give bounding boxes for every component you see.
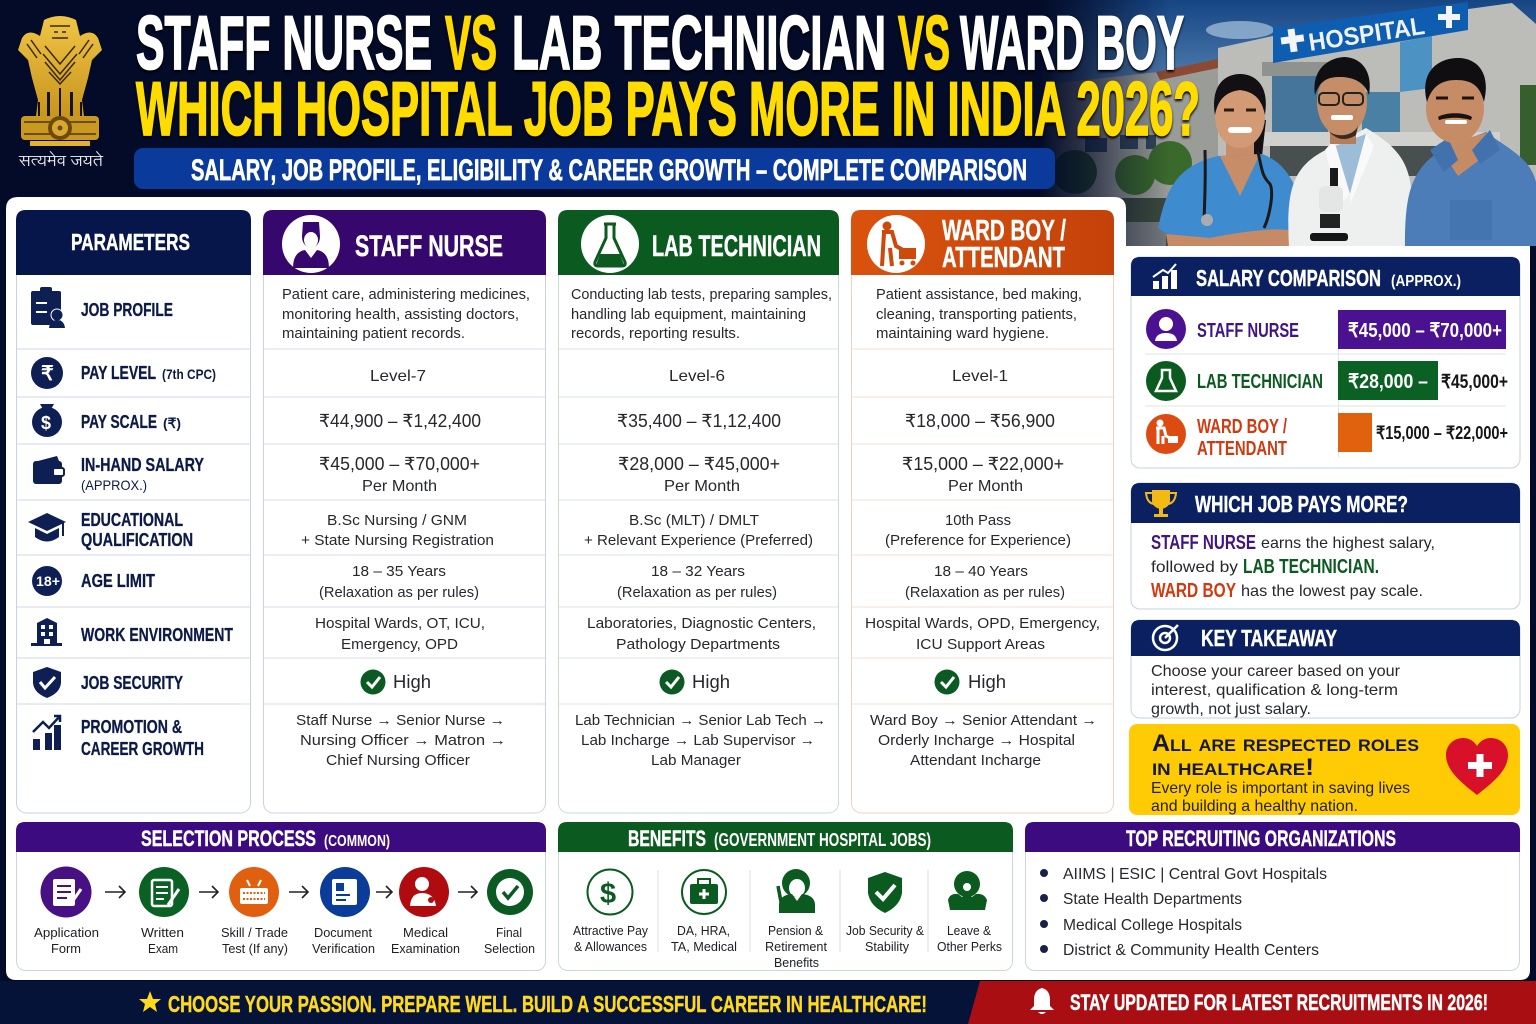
benefit: attractive pay: & Allowances: [574, 939, 647, 954]
title: LAB TECHNICIAN: [512, 1, 886, 86]
icon: rising bars: [1153, 264, 1177, 289]
panel: benefits: (GOVERNMENT HOSPITAL JOBS): [714, 830, 931, 850]
panel: ward boy column: Level-1: [952, 368, 1008, 385]
panel: ward boy column: ₹18,000 – ₹56,900: [905, 411, 1055, 431]
row: pay level: PAY LEVEL: [81, 363, 156, 383]
row: promotion and career growth: [33, 716, 204, 759]
row: promotion and career growth: CAREER GROWTH: [81, 739, 204, 759]
panel: which job pays more: WARD BOY: [1151, 580, 1237, 602]
benefit: pension: Retirement: [765, 939, 827, 954]
row: job profile: JOB PROFILE: [81, 300, 173, 320]
step: document verification: [312, 867, 375, 956]
panel: staff nurse column: Nursing Officer → Matron →: [300, 732, 506, 749]
emblem of India: [18, 16, 102, 146]
icon: attendant with cart: [867, 215, 925, 273]
panel: staff nurse column: ₹45,000 – ₹70,000+: [319, 454, 480, 474]
panel: benefits: [558, 822, 1013, 970]
person: ward attendant: [1405, 58, 1536, 246]
benefit: attractive pay: Attractive Pay: [573, 923, 648, 938]
row: promotion and career growth: PROMOTION &: [81, 717, 182, 737]
panel: top recruiting organizations: AIIMS | ESIC | Central Govt Hospitals: [1063, 866, 1327, 883]
title: VS: [898, 1, 950, 86]
icon: trophy: [1146, 490, 1176, 517]
step: final selection: [484, 869, 535, 956]
panel: ward boy column: [851, 210, 1114, 813]
icon: star: [139, 991, 161, 1012]
panel: lab technician column: records, reporting results.: [571, 325, 740, 342]
panel: staff nurse column: B.Sc Nursing / GNM: [327, 512, 467, 529]
panel: staff nurse column: Hospital Wards, OT, ICU,: [315, 615, 485, 632]
callout: respected roles: in healthcare!: [1152, 754, 1314, 781]
panel: selection process: [16, 822, 546, 970]
panel: ward boy column: Ward Boy → Senior Attendant →: [870, 712, 1097, 729]
panel: ward boy column: Attendant Incharge: [910, 752, 1041, 769]
panel: ward boy column: cleaning, transporting patients,: [876, 306, 1077, 323]
step: written exam: [139, 867, 189, 956]
benefit: allowances: DA, HRA,: [677, 923, 730, 938]
panel: lab technician column: Lab Manager: [651, 752, 741, 769]
panel: top recruiting organizations: State Health Departments: [1063, 891, 1242, 908]
subtitle bar: SALARY, JOB PROFILE, ELIGIBILITY & CAREER GROWTH – COMPLETE COMPARISON: [191, 154, 1027, 187]
row: age limit: [32, 566, 155, 596]
panel: staff nurse column: (Relaxation as per rules): [319, 584, 479, 601]
benefit: allowances: [671, 870, 737, 954]
step: skill test: [221, 867, 288, 956]
panel: benefits: BENEFITS: [628, 826, 706, 851]
panel: which job pays more: [1131, 483, 1520, 609]
panel: ward boy column: Hospital Wards, OPD, Emergency,: [865, 615, 1100, 632]
icon: check high: [934, 670, 960, 694]
row: pay scale: [32, 404, 181, 437]
step: final selection: Selection: [484, 941, 535, 956]
step: medical examination: Examination: [391, 941, 460, 956]
panel: staff nurse column: Emergency, OPD: [341, 636, 458, 653]
panel: ward boy column: Per Month: [948, 478, 1023, 495]
row: in-hand salary: [33, 455, 204, 493]
benefit: attractive pay: [573, 870, 648, 954]
step: written exam: Written: [141, 925, 184, 940]
row: ward boy salary: WARD BOY /: [1197, 416, 1287, 438]
row: work environment: WORK ENVIRONMENT: [81, 625, 233, 645]
panel: staff nurse column: Patient care, administering medicines,: [282, 286, 530, 303]
heading: ward boy attendant: [942, 215, 1066, 274]
hero photo: hospital and three staff: [1040, 0, 1536, 246]
icon: nurse: [282, 215, 340, 273]
benefit: leave and perks: Leave &: [947, 923, 991, 938]
row: lab technician salary: ₹28,000 –: [1348, 371, 1428, 393]
step: written exam: Exam: [148, 941, 178, 956]
row: pay level: (7th CPC): [162, 366, 216, 382]
arrow: [458, 886, 477, 898]
panel: lab technician column: High: [692, 672, 730, 692]
panel: lab technician column: ₹28,000 – ₹45,000+: [618, 454, 780, 474]
arrow: [289, 886, 308, 898]
panel: staff nurse column: ₹44,900 – ₹1,42,400: [319, 411, 481, 431]
step: medical examination: [391, 867, 460, 956]
arrow: [376, 886, 392, 898]
step: skill test: Skill / Trade: [221, 925, 288, 940]
icon: check high: [660, 670, 684, 694]
step: document verification: Document: [314, 925, 372, 940]
panel: salary comparison: [1131, 257, 1520, 468]
panel: lab technician column: handling lab equipment, maintaining: [571, 306, 806, 323]
person: staff nurse: [1158, 74, 1307, 246]
panel: key takeaway: growth, not just salary.: [1151, 701, 1311, 718]
panel: top recruiting organizations: [1025, 822, 1520, 970]
row: age limit: AGE LIMIT: [81, 571, 155, 591]
arrow: [199, 886, 218, 898]
row: ward boy salary: ATTENDANT: [1197, 438, 1287, 460]
panel: ward boy column: ₹15,000 – ₹22,000+: [902, 454, 1064, 474]
panel: ward boy column: ICU Support Areas: [916, 636, 1045, 653]
benefit: pension: Pension &: [768, 923, 823, 938]
title: VS: [445, 1, 497, 86]
row: educational qualification: QUALIFICATION: [81, 530, 193, 550]
subtitle bar: [134, 148, 1055, 189]
heading: parameters: PARAMETERS: [71, 229, 190, 255]
panel: lab technician column: (Relaxation as per rules): [617, 584, 777, 601]
panel: lab technician column: Level-6: [669, 368, 725, 385]
heading: ward boy attendant: ATTENDANT: [942, 242, 1065, 274]
person: lab technician: [1288, 57, 1412, 246]
row: ward boy salary: ₹15,000 – ₹22,000+: [1376, 423, 1508, 443]
step: final selection: Final: [496, 925, 522, 940]
callout: respected roles: Every role is important in saving lives: [1151, 780, 1410, 797]
panel: staff nurse column: + State Nursing Registration: [301, 532, 494, 549]
row: pay level: [31, 357, 216, 389]
row: staff nurse salary: [1146, 309, 1506, 349]
row: work environment: [31, 618, 233, 646]
row: job security: [33, 667, 183, 698]
benefit: pension: Benefits: [774, 955, 819, 970]
heading: lab technician: LAB TECHNICIAN: [652, 230, 821, 263]
panel: ward boy column: Orderly Incharge → Hospital: [878, 732, 1075, 749]
icon: bell: [1030, 988, 1054, 1014]
benefit: leave and perks: [937, 871, 1002, 954]
row: educational qualification: [28, 510, 193, 550]
panel: ward boy column: 18 – 40 Years: [934, 563, 1028, 580]
title: STAFF NURSE: [136, 1, 432, 86]
panel: which job pays more: has the lowest pay scale.: [1241, 583, 1423, 600]
panel: key takeaway: Choose your career based on your: [1151, 663, 1401, 680]
row: lab technician salary: ₹45,000+: [1441, 372, 1508, 393]
panel: which job pays more: STAFF NURSE: [1151, 532, 1256, 554]
panel: which job pays more: followed by: [1151, 559, 1238, 576]
panel: ward boy column: (Preference for Experience): [885, 532, 1071, 549]
heading: staff nurse: STAFF NURSE: [355, 230, 503, 263]
benefit: job security: Job Security &: [846, 923, 924, 938]
callout: respected roles: and building a healthy nation.: [1151, 798, 1358, 815]
panel: staff nurse column: [263, 210, 546, 813]
panel: selection process: (COMMON): [324, 833, 390, 850]
row: staff nurse salary: STAFF NURSE: [1197, 320, 1299, 342]
row: pay level: ₹: [41, 363, 54, 385]
title: [136, 1, 1200, 152]
panel: lab technician column: Laboratories, Diagnostic Centers,: [587, 615, 816, 632]
panel: ward boy column: Patient assistance, bed making,: [876, 286, 1082, 303]
panel: staff nurse column: monitoring health, assisting doctors,: [282, 306, 519, 323]
benefit: job security: [846, 872, 924, 954]
footer banner: [0, 981, 1536, 1024]
panel: staff nurse column: Per Month: [362, 478, 437, 495]
white main panel: [6, 197, 1530, 980]
callout: respected roles: [1129, 724, 1520, 815]
panel: key takeaway: KEY TAKEAWAY: [1201, 625, 1337, 651]
panel: selection process: SELECTION PROCESS: [141, 826, 316, 851]
panel: lab technician column: Lab Technician → Senior Lab Tech →: [575, 712, 826, 729]
row: staff nurse salary: ₹45,000 – ₹70,000+: [1348, 320, 1502, 342]
row: job security: JOB SECURITY: [81, 673, 183, 693]
step: application form: Form: [51, 941, 81, 956]
row: pay scale: $: [41, 413, 51, 433]
panel: key takeaway: [1131, 620, 1520, 718]
panel: staff nurse column: Level-7: [370, 368, 426, 385]
panel: ward boy column: maintaining ward hygiene.: [876, 325, 1049, 342]
panel: top recruiting organizations: District & Community Health Centers: [1063, 942, 1319, 959]
row: ward boy salary: [1146, 413, 1508, 460]
panel: lab technician column: Lab Incharge → Lab Supervisor →: [581, 732, 815, 749]
step: medical examination: Medical: [403, 925, 448, 940]
icon: target: [1153, 625, 1178, 650]
hospital sign: HOSPITAL: [1307, 12, 1427, 57]
row: lab technician salary: LAB TECHNICIAN: [1197, 371, 1323, 393]
step: document verification: Verification: [312, 941, 375, 956]
benefit: leave and perks: Other Perks: [937, 939, 1002, 954]
panel: staff nurse column: Staff Nurse → Senior Nurse →: [296, 712, 505, 729]
benefit: pension: [765, 869, 827, 970]
panel: salary comparison: (APPROX.): [1391, 273, 1461, 290]
panel: staff nurse column: High: [393, 672, 431, 692]
row: educational qualification: EDUCATIONAL: [81, 510, 183, 530]
panel: lab technician column: Per Month: [664, 478, 740, 495]
panel: top recruiting organizations: TOP RECRUITING ORGANIZATIONS: [1126, 826, 1396, 851]
step: application form: [34, 866, 99, 956]
footer banner: CHOOSE YOUR PASSION. PREPARE WELL. BUILD A SUCCESSFUL CAREER IN HEALTHCARE!: [168, 991, 927, 1017]
callout: respected roles: All are respected roles: [1152, 730, 1419, 757]
panel: ward boy column: (Relaxation as per rules): [905, 584, 1065, 601]
panel: staff nurse column: Chief Nursing Officer: [326, 752, 470, 769]
icon: heart with cross: [1446, 738, 1508, 795]
row: pay scale: PAY SCALE: [81, 412, 157, 432]
panel: lab technician column: [558, 210, 839, 813]
heading: ward boy attendant: WARD BOY /: [942, 215, 1066, 247]
panel: staff nurse column: maintaining patient records.: [282, 325, 465, 342]
emblem motto: सत्यमेव जयते: [18, 150, 104, 170]
row: in-hand salary: IN-HAND SALARY: [81, 455, 204, 475]
step: application form: Application: [34, 925, 99, 940]
row: age limit: 18+: [36, 573, 60, 589]
row: job profile: [31, 287, 173, 328]
panel: lab technician column: Pathology Departments: [616, 636, 780, 653]
step: skill test: Test (If any): [222, 941, 288, 956]
arrow: [105, 886, 125, 898]
panel: parameters column: [16, 210, 251, 813]
benefit: allowances: TA, Medical: [671, 939, 737, 954]
icon: check high: [360, 670, 386, 694]
panel: which job pays more: earns the highest salary,: [1261, 535, 1435, 552]
panel: staff nurse column: 18 – 35 Years: [352, 563, 446, 580]
title: WARD BOY: [960, 1, 1184, 86]
panel: ward boy column: High: [968, 672, 1006, 692]
row: pay scale: (₹): [163, 415, 181, 431]
panel: which job pays more: WHICH JOB PAYS MORE?: [1195, 491, 1408, 517]
panel: key takeaway: interest, qualification & long-term: [1151, 682, 1398, 699]
panel: which job pays more: LAB TECHNICIAN.: [1243, 556, 1379, 578]
panel: ward boy column: 10th Pass: [945, 512, 1011, 529]
panel: lab technician column: Conducting lab tests, preparing samples,: [571, 286, 832, 303]
panel: lab technician column: B.Sc (MLT) / DMLT: [629, 512, 759, 529]
row: in-hand salary: (APPROX.): [81, 477, 147, 493]
hospital sign: [1273, 2, 1468, 63]
panel: lab technician column: ₹35,400 – ₹1,12,400: [617, 411, 781, 431]
benefit: job security: Stability: [865, 939, 909, 954]
panel: top recruiting organizations: Medical College Hospitals: [1063, 917, 1242, 934]
panel: salary comparison: SALARY COMPARISON: [1196, 265, 1381, 291]
row: lab technician salary: [1146, 361, 1508, 401]
icon: flask: [581, 215, 639, 273]
panel: lab technician column: + Relevant Experience (Preferred): [584, 532, 813, 549]
panel: lab technician column: 18 – 32 Years: [651, 563, 745, 580]
benefit: attractive pay: $: [600, 878, 616, 910]
